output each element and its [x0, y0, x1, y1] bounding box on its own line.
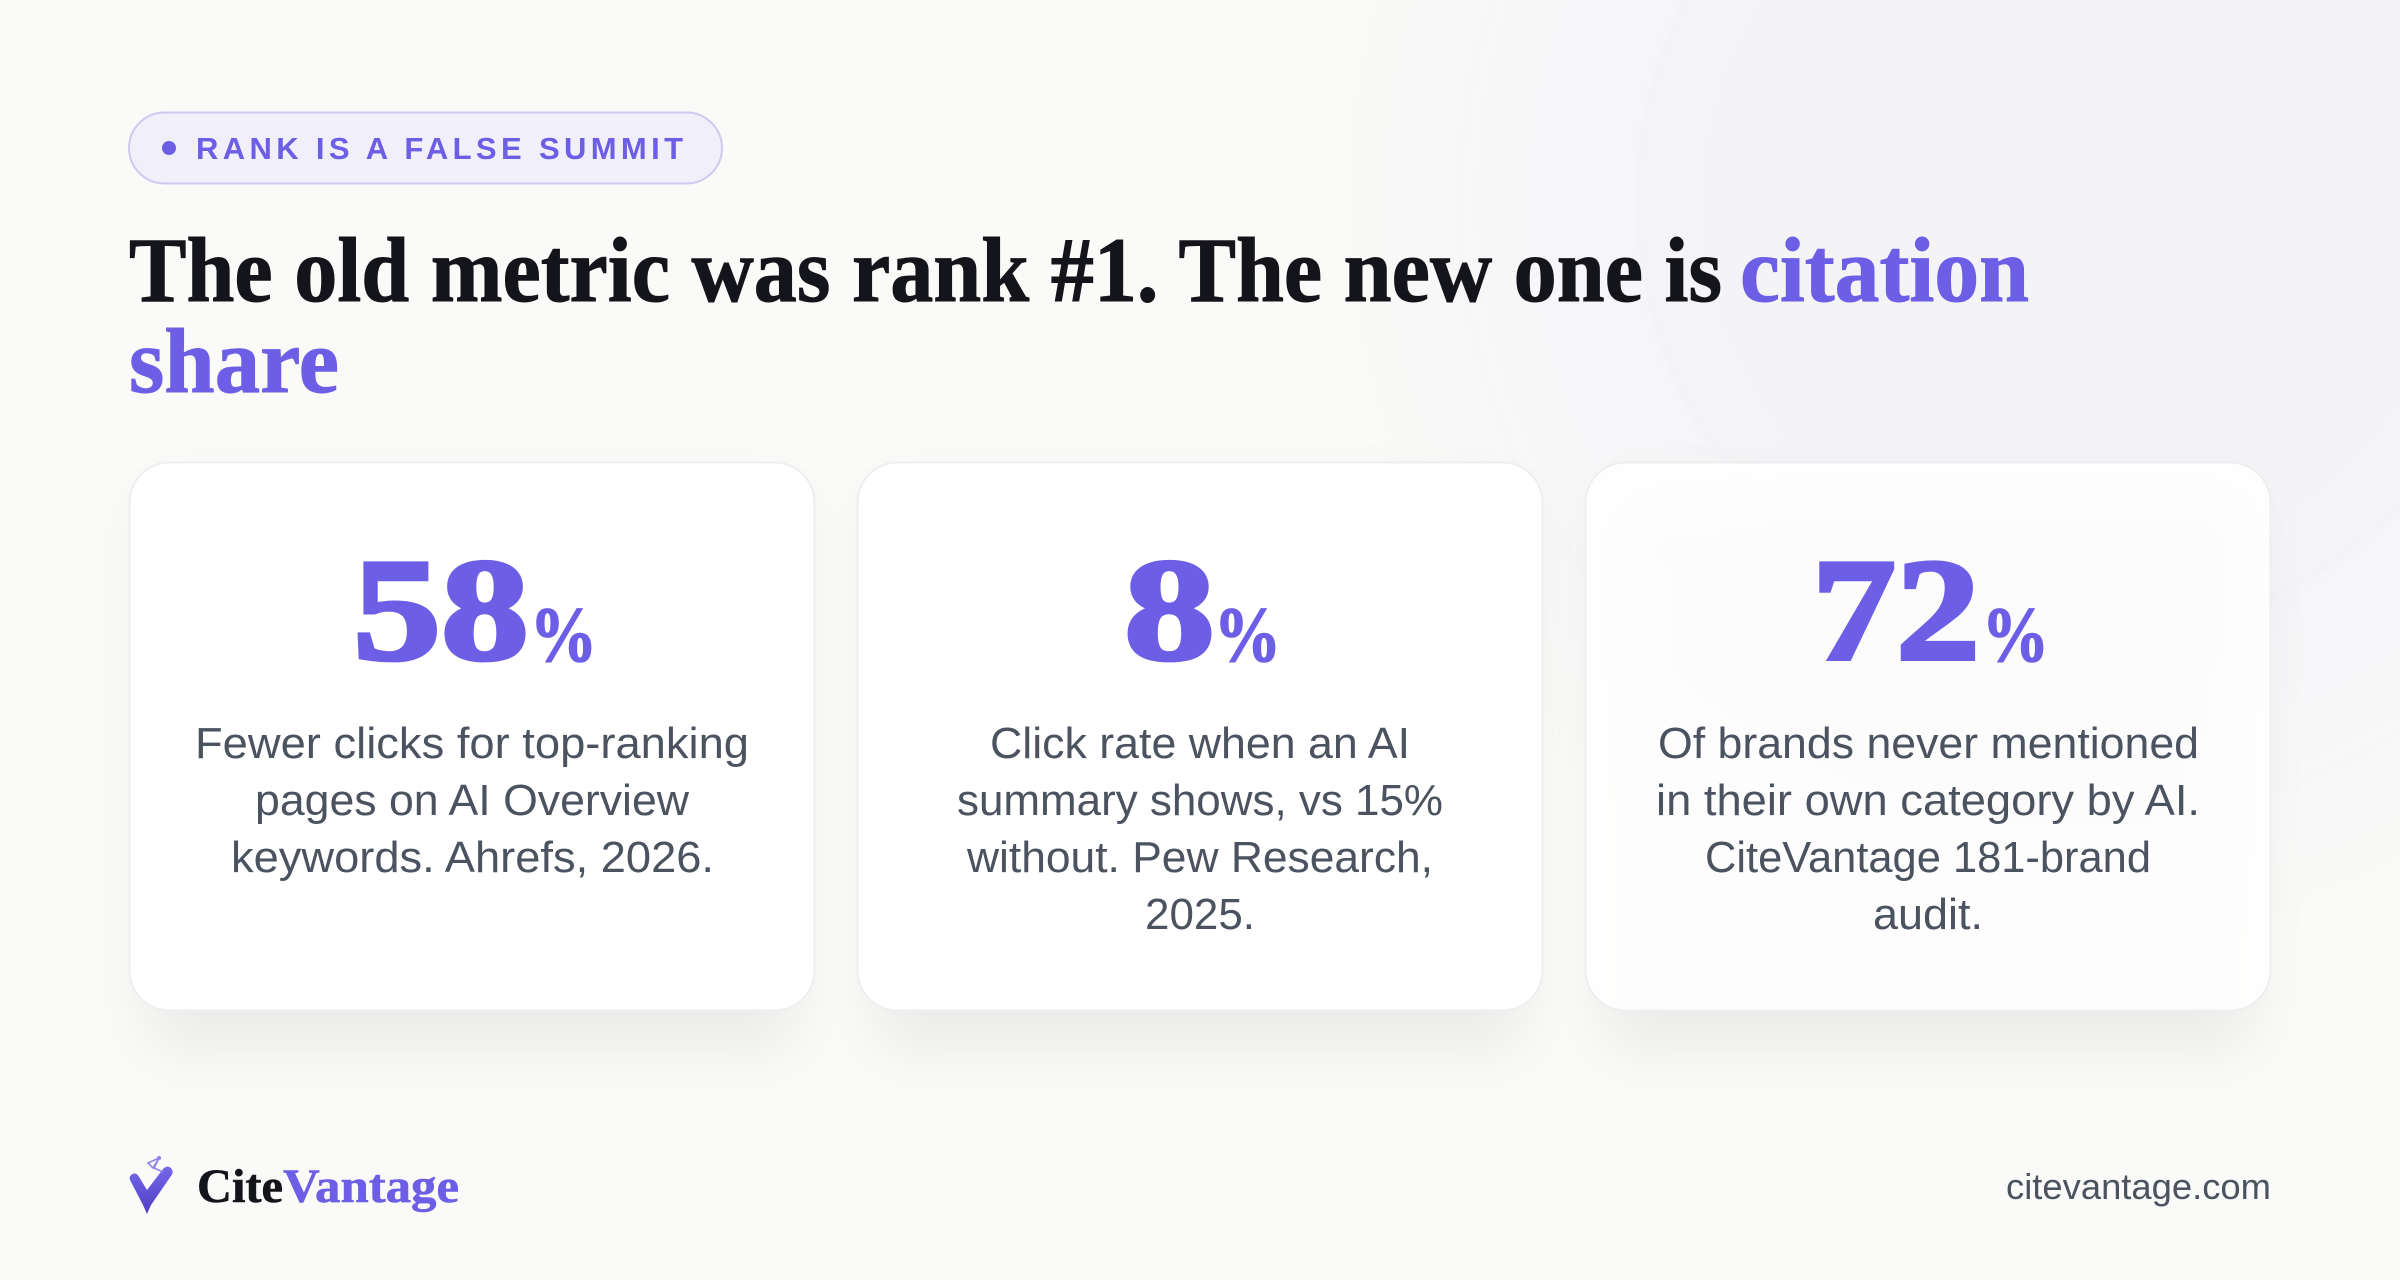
- title: [129, 219, 2029, 412]
- title: The old metric was rank #1. The new one is: [129, 219, 1722, 321]
- stat description 3: audit.: [1873, 890, 1983, 939]
- stat value: 8%: %: [1214, 591, 1281, 678]
- background glow rings: [1300, 0, 2400, 980]
- eyebrow pill: [129, 112, 722, 184]
- stat value: 8%: 8: [1124, 529, 1215, 691]
- panel: stat card 3: [1586, 462, 2270, 1050]
- brand wordmark: Vantage: [283, 1160, 459, 1213]
- stat description 2: summary shows, vs 15%: [957, 776, 1443, 825]
- stat description 3: in their own category by AI.: [1656, 776, 2200, 825]
- stat description 2: 2025.: [1145, 890, 1255, 939]
- stat description 3: [1656, 719, 2200, 939]
- panel: stat card 1: [130, 462, 814, 1050]
- stat description 2: without. Pew Research,: [966, 833, 1433, 882]
- stat description 1: Fewer clicks for top-ranking: [195, 719, 749, 768]
- stat value: 8%: [1124, 529, 1281, 691]
- panel: stat card 2: [858, 462, 1542, 1050]
- stat description 1: pages on AI Overview: [255, 776, 689, 825]
- stat description 1: keywords. Ahrefs, 2026.: [231, 833, 714, 882]
- stat description 3: Of brands never mentioned: [1658, 719, 2199, 768]
- stat value: 72%: [1812, 529, 2049, 691]
- title: share: [129, 310, 339, 412]
- stat description 1: [195, 719, 749, 882]
- brand wordmark: Cite: [197, 1160, 283, 1213]
- title: citation: [1740, 219, 2029, 321]
- stat value: 72%: %: [1982, 591, 2049, 678]
- stat description 2: Click rate when an AI: [990, 719, 1410, 768]
- stat value: 58%: 58: [353, 529, 529, 691]
- eyebrow pill: RANK IS A FALSE SUMMIT: [196, 131, 683, 166]
- stat value: 58%: %: [530, 591, 597, 678]
- stat description 3: CiteVantage 181-brand: [1705, 833, 2151, 882]
- icon: CiteVantage logo mark: [130, 1156, 173, 1214]
- stat value: 58%: [353, 529, 597, 691]
- brand wordmark: [197, 1160, 459, 1213]
- stat description 2: [957, 719, 1443, 939]
- website url: citevantage.com: [2006, 1166, 2271, 1207]
- stat value: 72%: 72: [1812, 529, 1980, 691]
